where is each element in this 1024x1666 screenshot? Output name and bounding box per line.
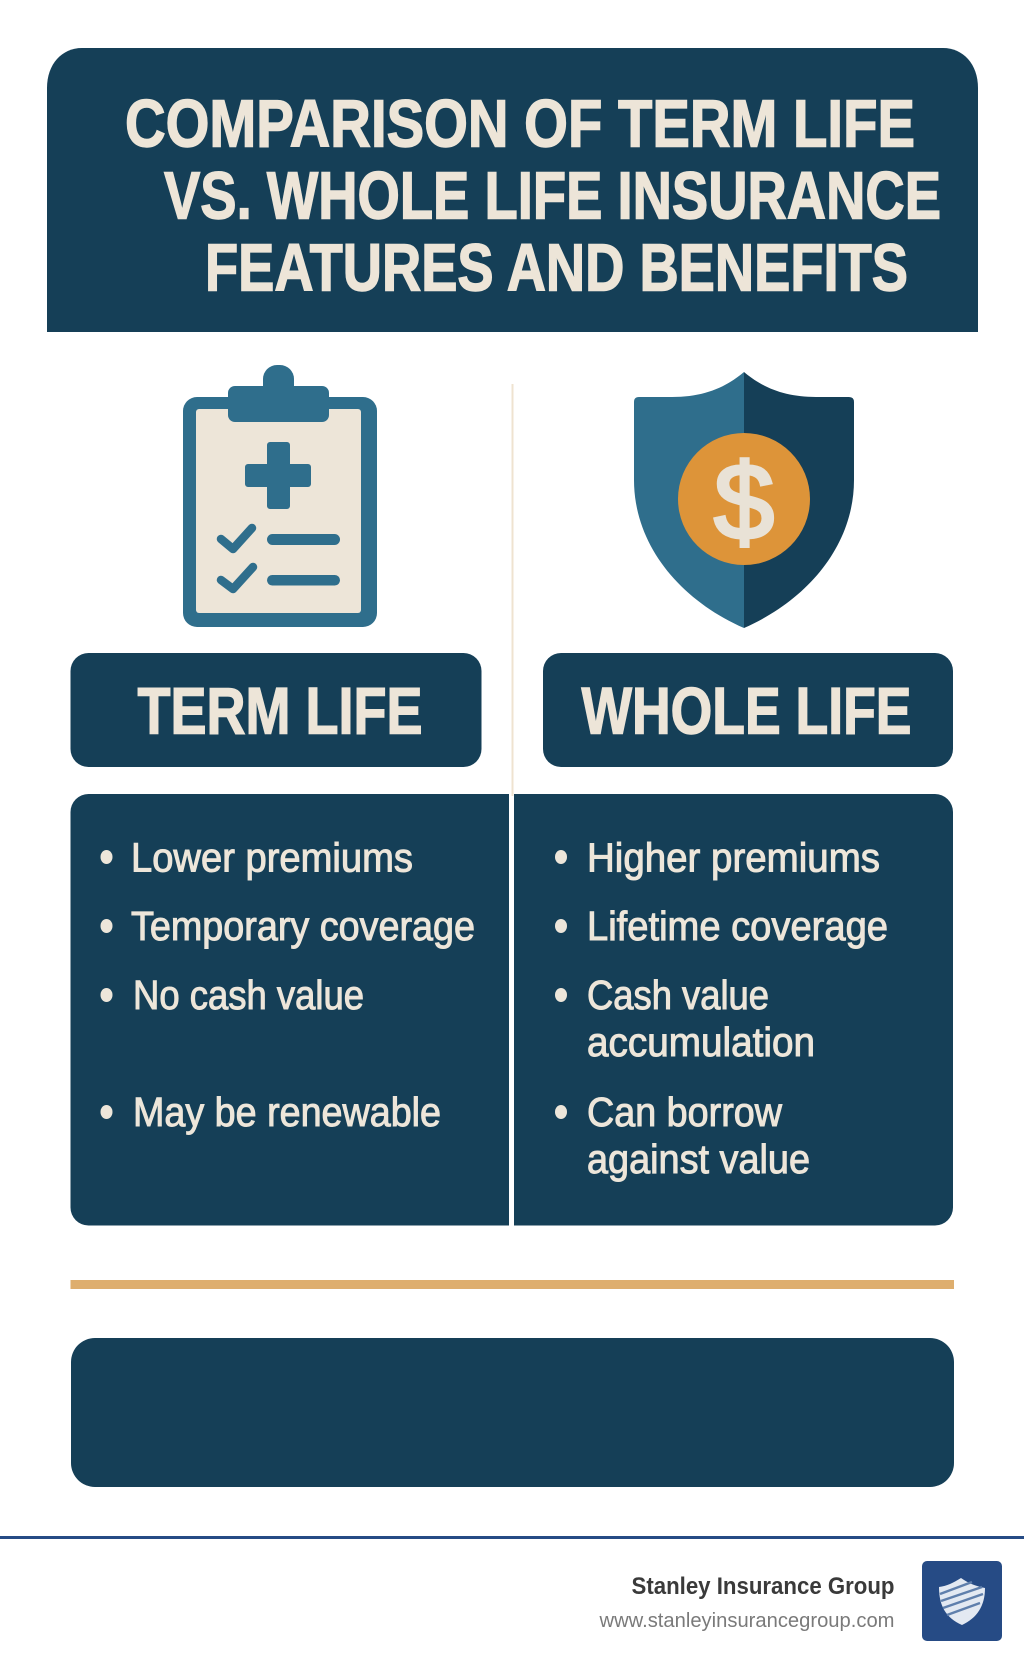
icon: shield with dollar coin: $ [714, 441, 774, 562]
panel: whole life features: against value [587, 1136, 810, 1182]
footer company name: Stanley Insurance Group [632, 1573, 894, 1600]
panel: whole life features: Cash value [587, 972, 769, 1018]
icon: shield with dollar coin [634, 372, 854, 628]
panel: term life features [70, 794, 509, 1226]
panel: term life features: Lower premiums [131, 834, 413, 880]
heading: term life: TERM LIFE [138, 674, 422, 748]
panel: term life features: No cash value [133, 972, 364, 1018]
panel: term life features: May be renewable [133, 1089, 441, 1135]
panel: term life features: Temporary coverage [131, 903, 475, 949]
center divider line [512, 384, 514, 796]
heading: whole life [543, 653, 953, 767]
heading: whole life: WHOLE LIFE [582, 674, 912, 748]
panel: whole life features: Lifetime coverage [587, 903, 888, 949]
panel: whole life features: Higher premiums [587, 834, 880, 880]
empty summary panel [71, 1338, 954, 1487]
icon: medical clipboard [183, 365, 377, 627]
logo: striped shield [922, 1561, 1002, 1641]
title banner [47, 48, 978, 332]
panel: whole life features [514, 794, 953, 1226]
heading: term life [70, 653, 482, 767]
footer website: www.stanleyinsurancegroup.com [599, 1609, 894, 1632]
panel: whole life features: accumulation [587, 1019, 815, 1065]
orange separator bar [70, 1280, 954, 1289]
panel: whole life features: Can borrow [587, 1089, 782, 1135]
footer rule [0, 1536, 1024, 1539]
